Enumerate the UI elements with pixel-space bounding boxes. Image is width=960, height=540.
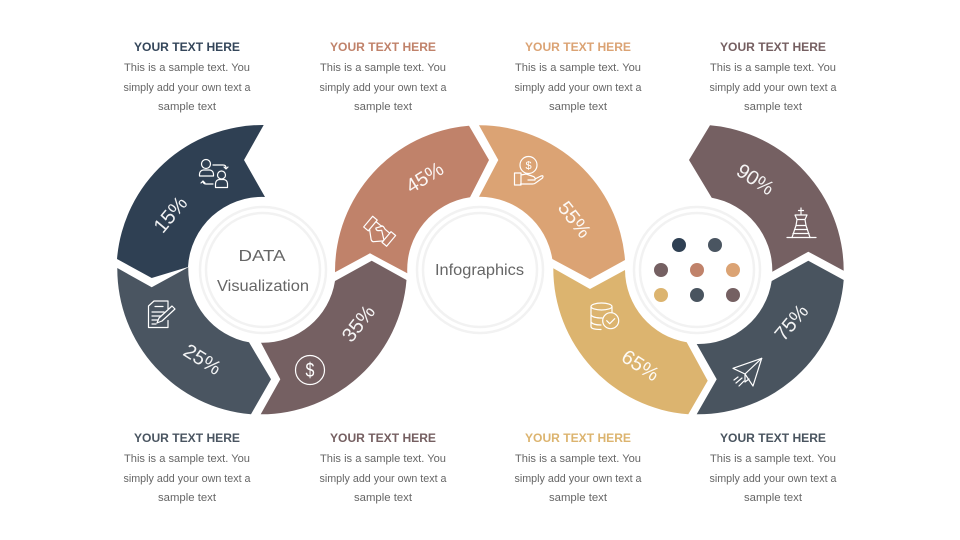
label: 15%: 15% [150, 192, 192, 237]
text block: top 4: sample text [744, 101, 802, 113]
text block: top 3: simply add your own text a [514, 82, 642, 94]
label: 25%: 25% [179, 340, 225, 380]
text block: bottom 4: sample text [744, 492, 802, 504]
text block: bottom 4: simply add your own text a [710, 473, 836, 485]
icon: dollar coin [296, 356, 324, 384]
center text [217, 248, 309, 295]
text block: top 4: simply add your own text a [710, 82, 836, 94]
text block: bottom 2: simply add your own text a [320, 473, 446, 485]
text block: top 1: simply add your own text a [124, 82, 250, 94]
text block: top 1: This is a sample text. You [124, 62, 250, 74]
text block: bottom 2: This is a sample text. You [320, 453, 446, 465]
text block: bottom 1: sample text [158, 492, 216, 504]
text block: bottom 1 [124, 431, 250, 504]
segment: 55% [479, 125, 625, 279]
text block: top 1: sample text [158, 101, 216, 113]
text block: bottom 3 [514, 431, 642, 504]
text block: bottom 1: YOUR TEXT HERE [134, 431, 240, 445]
text block: bottom 3: This is a sample text. You [515, 453, 641, 465]
center text: Visualization [217, 278, 309, 295]
label: 65%: 65% [617, 346, 663, 386]
label: 45%: 45% [402, 158, 448, 198]
text block: top 2 [320, 40, 446, 113]
text block: top 1 [124, 40, 250, 113]
center circle: colour dots [634, 207, 760, 333]
label: 55%: 55% [553, 197, 595, 243]
text block: top 2: sample text [354, 101, 412, 113]
segment: 25% [117, 267, 271, 414]
text block: top 2: simply add your own text a [320, 82, 446, 94]
icon: chess king [787, 208, 816, 238]
icon: people swap [200, 160, 228, 188]
text block: bottom 4 [710, 431, 836, 504]
text block: bottom 1: This is a sample text. You [124, 453, 250, 465]
text block: bottom 3: sample text [549, 492, 607, 504]
segment: 35% [261, 261, 406, 414]
text block: bottom 4: This is a sample text. You [710, 453, 836, 465]
segment: 65% [553, 268, 708, 414]
text block: top 2: YOUR TEXT HERE [330, 40, 436, 54]
label: 75%: 75% [771, 300, 813, 345]
icon: hand holding coin: $ [525, 160, 532, 172]
icon: hand holding coin [514, 156, 543, 185]
text block: top 4 [710, 40, 836, 113]
text block: bottom 3: YOUR TEXT HERE [525, 431, 631, 445]
text block: bottom 3: simply add your own text a [514, 473, 642, 485]
text block: top 3 [514, 40, 642, 113]
text block: top 3: This is a sample text. You [515, 62, 641, 74]
text block: bottom 2: YOUR TEXT HERE [330, 431, 436, 445]
icon: paper plane [733, 358, 762, 386]
text block: bottom 2: sample text [354, 492, 412, 504]
text block: bottom 1: simply add your own text a [124, 473, 250, 485]
segment: 75% [697, 261, 844, 414]
segment: 15% [117, 125, 265, 278]
center circle: DATA Visualization [200, 207, 326, 333]
text block: top 4: This is a sample text. You [710, 62, 836, 74]
icon: handshake [360, 216, 396, 250]
center text: DATA [238, 248, 286, 265]
segment: 90% [689, 125, 844, 272]
text block: top 3: YOUR TEXT HERE [525, 40, 631, 54]
icon: document and pen [148, 301, 175, 328]
text block: top 3: sample text [549, 101, 607, 113]
label: 90%: 90% [732, 160, 778, 200]
text block: bottom 4: YOUR TEXT HERE [720, 431, 826, 445]
center text: Infographics [435, 262, 524, 279]
center circle: Infographics [417, 207, 543, 333]
text block: top 1: YOUR TEXT HERE [134, 40, 240, 54]
icon: dollar coin: $ [306, 359, 314, 381]
colour dots [654, 238, 740, 302]
label: 35%: 35% [338, 301, 380, 347]
text block: bottom 2 [320, 431, 446, 504]
text block: top 2: This is a sample text. You [320, 62, 446, 74]
segment: 45% [335, 126, 489, 273]
icon: database check [591, 303, 619, 330]
text block: top 4: YOUR TEXT HERE [720, 40, 826, 54]
